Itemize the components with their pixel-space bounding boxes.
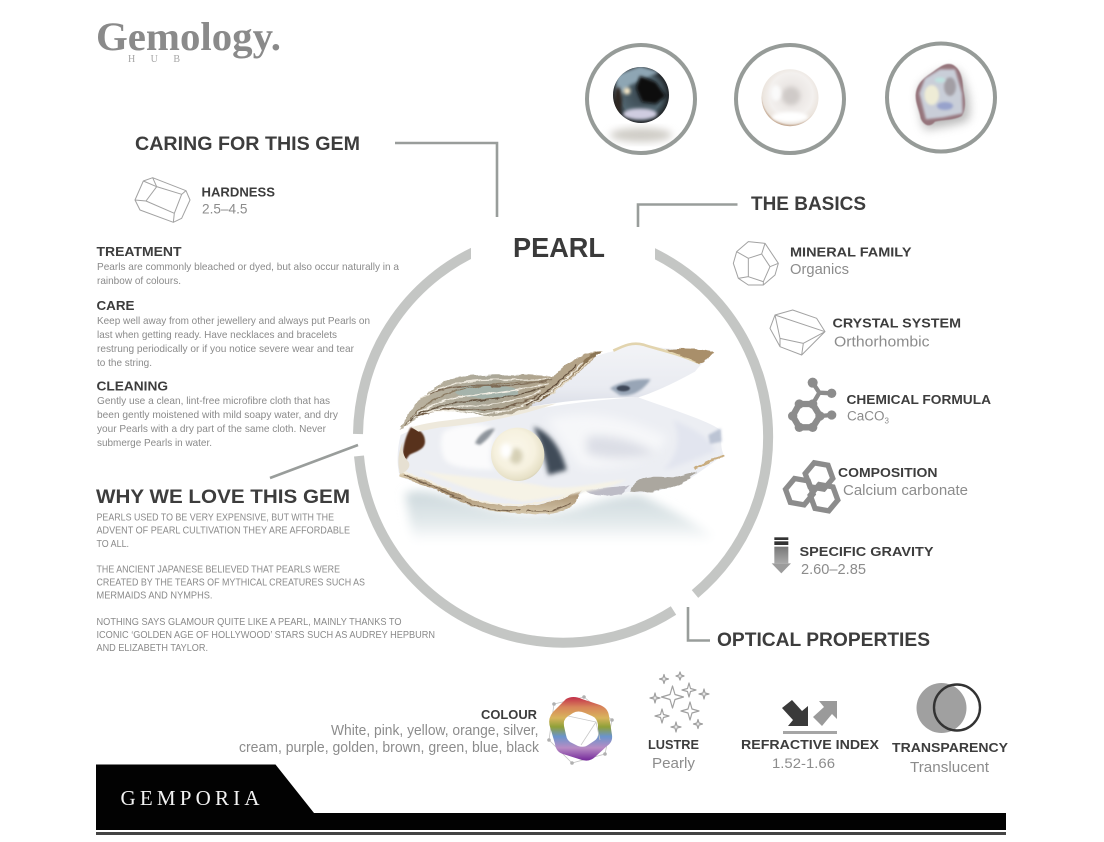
icon: refraction arrows bbox=[782, 700, 837, 734]
circular ring around shell bbox=[358, 235, 768, 643]
logo: Gemology Hub: Gemology. bbox=[96, 14, 281, 59]
upper shell exterior bbox=[400, 350, 602, 430]
connector line bbox=[638, 204, 738, 227]
icon: overlapping circles bbox=[916, 683, 980, 733]
composition item: COMPOSITION bbox=[838, 465, 938, 480]
chemical formula item: CHEMICAL FORMULA bbox=[846, 392, 992, 407]
icon: hardness crystal bbox=[135, 178, 190, 222]
heading: why we love this gem: WHY WE LOVE THIS GEM bbox=[96, 487, 350, 508]
chemical formula item: 3 bbox=[885, 416, 890, 426]
icon: orthorhombic crystal bbox=[770, 310, 825, 355]
hardness item bbox=[135, 178, 275, 222]
paragraph: glamour bbox=[96, 616, 435, 654]
heading: optical properties: OPTICAL PROPERTIES bbox=[717, 630, 930, 651]
title: Pearl: PEARL bbox=[513, 232, 605, 263]
lustre item: LUSTRE bbox=[648, 737, 699, 752]
paragraph: glamour: ICONIC ‘GOLDEN AGE OF HOLLYWOOD’ STARS SUCH AS AUDREY HEPBURN bbox=[96, 629, 435, 641]
hardness item: 2.5–4.5 bbox=[202, 200, 248, 216]
image: oyster shell with pearl bbox=[398, 343, 724, 542]
cleaning text: Gently use a clean, lint-free microfibre cloth that has bbox=[97, 395, 330, 407]
paragraph: cost: ADVENT OF PEARL CULTIVATION THEY ARE AFFORDABLE bbox=[96, 524, 350, 536]
section: caring for this gem bbox=[96, 134, 497, 449]
care text: to the string. bbox=[97, 357, 152, 369]
transparency item: Translucent bbox=[910, 759, 990, 776]
refractive index item bbox=[741, 700, 879, 771]
care text: restrung periodically or if you notice severe wear and tear bbox=[97, 343, 354, 355]
paragraph: cost: PEARLS USED TO BE VERY EXPENSIVE, BUT WITH THE bbox=[96, 512, 334, 524]
heading: caring for this gem: CARING FOR THIS GEM bbox=[135, 134, 360, 155]
treatment text: rainbow of colours. bbox=[97, 275, 181, 287]
section: the basics bbox=[638, 194, 992, 578]
connector line bbox=[688, 607, 710, 640]
chemical formula item: CaCO bbox=[847, 408, 885, 424]
paragraph: japanese belief: THE ANCIENT JAPANESE BELIEVED THAT PEARLS WERE bbox=[96, 564, 340, 576]
care text: CARE bbox=[96, 298, 135, 313]
treatment text: TREATMENT bbox=[96, 244, 182, 259]
icon: gravity arrow bbox=[772, 537, 791, 573]
paragraph: cost: TO ALL. bbox=[96, 538, 129, 550]
connector line bbox=[270, 445, 358, 478]
crystal system item bbox=[770, 310, 961, 355]
colour item: White, pink, yellow, orange, silver, bbox=[331, 722, 538, 739]
care text bbox=[96, 298, 370, 369]
colour item bbox=[239, 695, 614, 765]
lustre item: Pearly bbox=[652, 755, 695, 772]
icon: molecule bbox=[788, 378, 836, 432]
cleaning text: CLEANING bbox=[96, 378, 168, 394]
connector line bbox=[395, 143, 497, 217]
footer: Gemporia banner bbox=[96, 764, 1006, 835]
paragraph: cost bbox=[96, 512, 350, 550]
refractive index item: REFRACTIVE INDEX bbox=[741, 737, 879, 752]
crystal system item: Orthorhombic bbox=[834, 334, 930, 350]
pearl bbox=[491, 428, 544, 481]
composition item bbox=[786, 463, 968, 511]
transparency item: TRANSPARENCY bbox=[892, 740, 1008, 755]
cleaning text: your Pearls with a dry part of the same cloth. Never bbox=[97, 423, 326, 435]
mineral family item: Organics bbox=[790, 261, 849, 278]
composition item: Calcium carbonate bbox=[843, 482, 968, 499]
logo: Gemology Hub: H U B bbox=[128, 54, 180, 65]
footer: Gemporia banner: GEMPORIA bbox=[120, 786, 260, 810]
lower shell bbox=[398, 397, 724, 515]
upper shell interior bbox=[527, 343, 713, 407]
crystal system item: CRYSTAL SYSTEM bbox=[832, 316, 961, 330]
paragraph: glamour: NOTHING SAYS GLAMOUR QUITE LIKE A PEARL, MAINLY THANKS TO bbox=[96, 616, 402, 628]
specific gravity item: 2.60–2.85 bbox=[801, 561, 866, 578]
icon: rainbow colour ring bbox=[547, 695, 614, 765]
cleaning text bbox=[96, 378, 339, 449]
pearl variety circles bbox=[587, 44, 995, 153]
care text: Keep well away from other jewellery and always put Pearls on bbox=[97, 315, 370, 327]
treatment text: Pearls are commonly bleached or dyed, but also occur naturally in a bbox=[97, 261, 399, 273]
hardness item: HARDNESS bbox=[202, 184, 275, 200]
paragraph: japanese belief: MERMAIDS AND NYMPHS. bbox=[96, 590, 212, 602]
paragraph: japanese belief: CREATED BY THE TEARS OF MYTHICAL CREATURES SUCH AS bbox=[96, 576, 365, 588]
mineral family item bbox=[733, 242, 912, 285]
transparency item bbox=[892, 683, 1008, 776]
paragraph: glamour: AND ELIZABETH TAYLOR. bbox=[96, 642, 208, 654]
icon: hexagon cluster bbox=[786, 463, 838, 511]
heading: the basics: THE BASICS bbox=[751, 194, 866, 215]
cleaning text: submerge Pearls in water. bbox=[97, 437, 212, 449]
icon: black pearl bbox=[587, 45, 695, 153]
treatment text bbox=[96, 244, 399, 287]
specific gravity item: SPECIFIC GRAVITY bbox=[800, 544, 934, 559]
mineral family item: MINERAL FAMILY bbox=[790, 244, 912, 260]
specific gravity item bbox=[772, 537, 934, 578]
refractive index item: 1.52-1.66 bbox=[772, 755, 835, 771]
colour item: cream, purple, golden, brown, green, blue, black bbox=[239, 739, 539, 756]
icon: white pearl bbox=[736, 45, 844, 153]
paragraph: japanese belief bbox=[96, 564, 365, 602]
lustre item bbox=[648, 672, 709, 772]
icon: dodecahedron bbox=[733, 242, 778, 285]
section: why we love this gem bbox=[96, 445, 435, 654]
chemical formula item bbox=[788, 378, 992, 432]
colour item: COLOUR bbox=[481, 707, 538, 722]
icon: sparkles bbox=[650, 672, 709, 732]
cleaning text: been gently moistened with mild soapy water, and dry bbox=[97, 409, 339, 421]
care text: last when getting ready. Have necklaces and bracelets bbox=[97, 329, 337, 341]
icon: baroque pearl bbox=[887, 44, 995, 152]
section: optical properties bbox=[239, 607, 1008, 776]
